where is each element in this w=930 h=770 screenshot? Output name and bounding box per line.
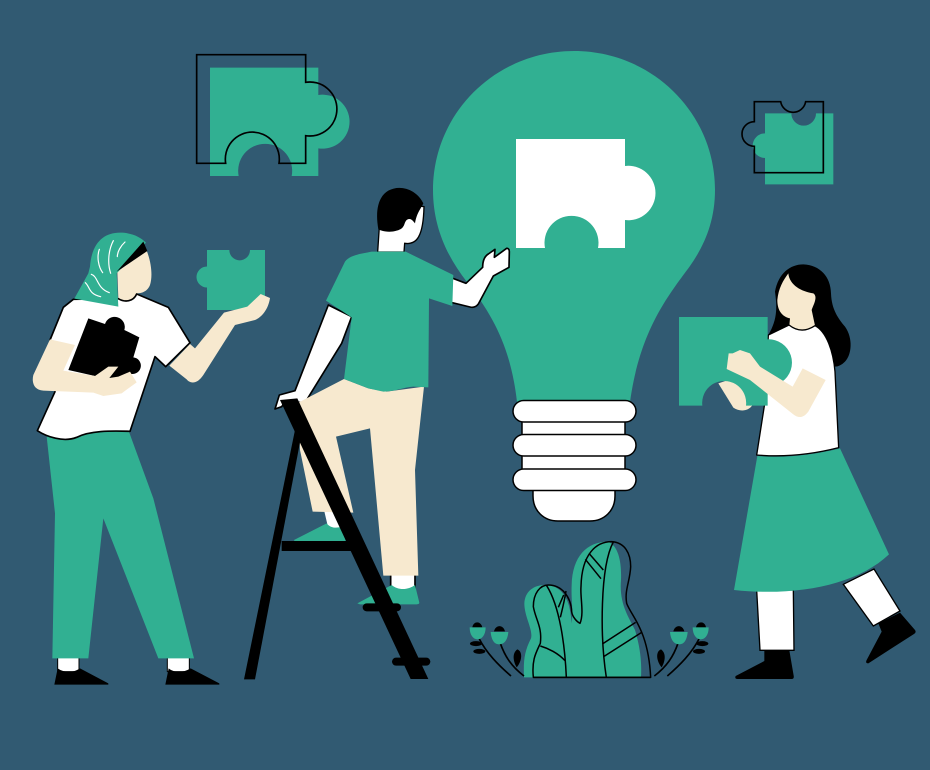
held black puzzle: [68, 317, 141, 379]
hair: [768, 264, 851, 367]
headband: [117, 242, 147, 272]
white shirt: [757, 325, 839, 456]
white shirt: [37, 294, 190, 439]
shoes: [735, 613, 916, 679]
skirt: [734, 448, 889, 592]
plant fill: [524, 542, 641, 677]
front foot: [357, 573, 419, 604]
bulb base: [513, 400, 636, 521]
legs: [757, 569, 900, 650]
person: left woman with headscarf: [33, 233, 270, 685]
hair: [377, 188, 423, 232]
shoes: [54, 668, 219, 685]
right arm and hand: [169, 294, 270, 382]
back arm and hand: [275, 305, 352, 409]
ladder: [244, 398, 430, 679]
trousers: [47, 430, 194, 658]
flowers: right: [654, 622, 709, 676]
lower hand: [718, 378, 753, 411]
face and neck: [777, 273, 815, 330]
back foot: [294, 510, 346, 542]
neck and face: [117, 251, 151, 301]
headscarf: [74, 233, 146, 307]
front arm and hand: [447, 248, 509, 307]
green shirt: [326, 252, 453, 392]
trousers: [298, 379, 424, 576]
light bulb: [433, 51, 715, 521]
plant: [524, 542, 651, 677]
left arm: [33, 339, 137, 396]
puzzle piece: top left: [197, 55, 350, 176]
socks: [58, 657, 189, 672]
green puzzle: [679, 317, 792, 406]
front arm and hand: [727, 350, 826, 417]
scarf fold lines: [85, 241, 125, 297]
flowers: left: [470, 622, 524, 676]
plant outline and veins: [533, 542, 651, 677]
puzzle in raised hand: [196, 250, 265, 310]
person: right woman holding puzzle: [679, 264, 916, 679]
puzzle piece: top right: [742, 102, 833, 184]
person: man on ladder: [244, 188, 509, 679]
bulb glass: [433, 51, 715, 402]
face and neck: [378, 200, 424, 252]
white puzzle piece in bulb: [516, 139, 655, 248]
